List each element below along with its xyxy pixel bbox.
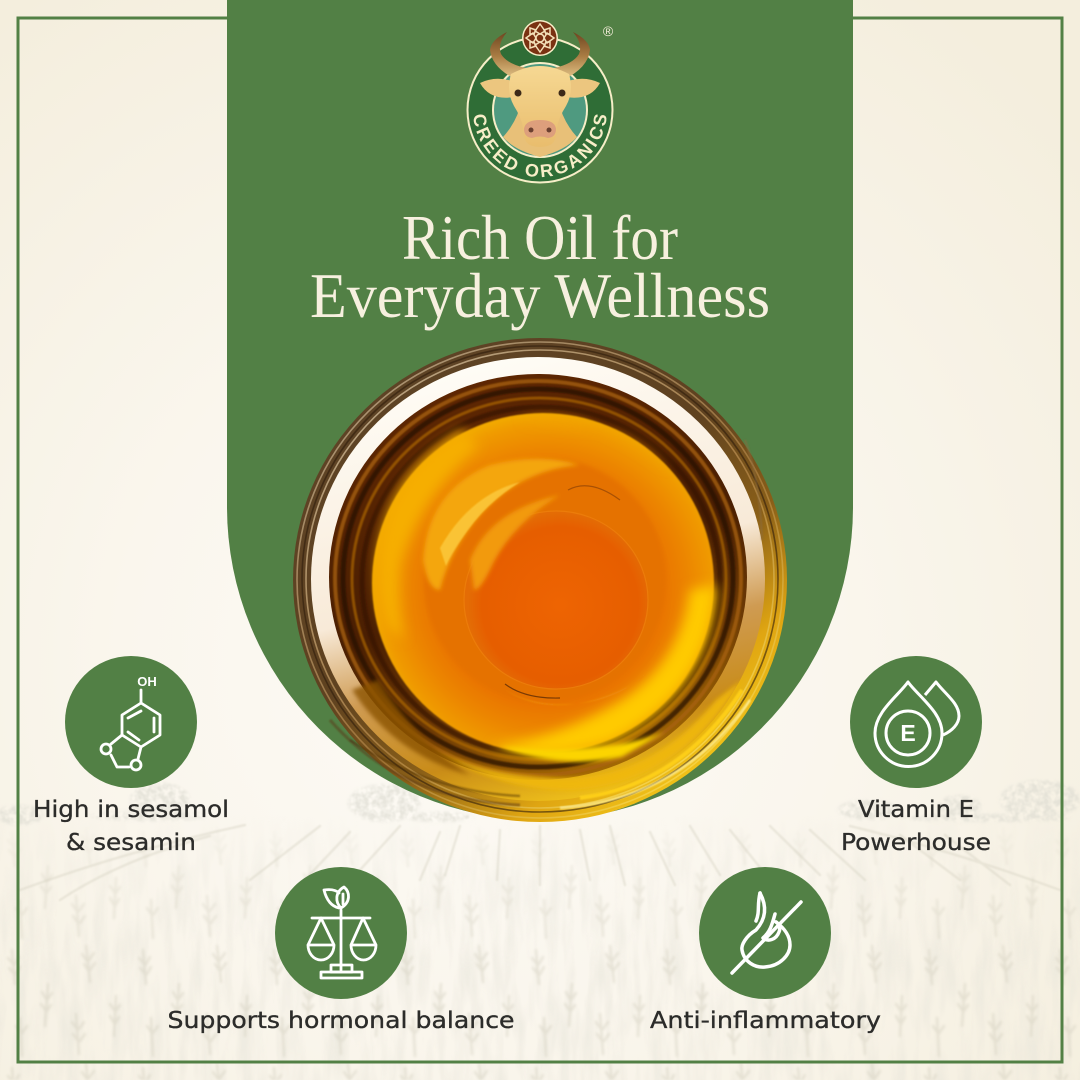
label: Supports hormonal balance [168, 1006, 514, 1034]
label: Powerhouse [841, 828, 991, 856]
background: cream field [0, 233, 1079, 1080]
icon: scales with leaves [275, 867, 407, 999]
label: Anti-inflammatory [650, 1006, 881, 1034]
title: Rich Oil for [402, 203, 678, 273]
title [310, 203, 770, 331]
icon: crossed-out flame [699, 867, 831, 999]
icon: vitamin E drops [850, 656, 982, 788]
icon: sesamol molecule: OH [137, 674, 157, 689]
logo: Creed Organics cow badge [466, 20, 614, 184]
registered mark: ® [603, 23, 614, 39]
label: & sesamin [66, 828, 196, 856]
title: Everyday Wellness [310, 261, 770, 331]
label [841, 795, 991, 856]
label: High in sesamol [33, 795, 229, 823]
feature: anti-inflammatory [650, 867, 881, 1034]
icon: sesamol molecule [65, 656, 197, 788]
label [33, 795, 229, 856]
feature: vitamin E [841, 656, 991, 856]
logo emblem [522, 20, 558, 56]
feature: hormonal balance [168, 867, 514, 1034]
icon: vitamin E drops: E [900, 720, 916, 746]
cow illustration [480, 32, 600, 157]
label: Vitamin E [858, 795, 974, 823]
feature: high in sesamol [33, 656, 229, 856]
panel: green arch [227, 0, 853, 820]
logo text: CREED ORGANICS [474, 114, 606, 178]
oil bowl photo [293, 338, 787, 822]
